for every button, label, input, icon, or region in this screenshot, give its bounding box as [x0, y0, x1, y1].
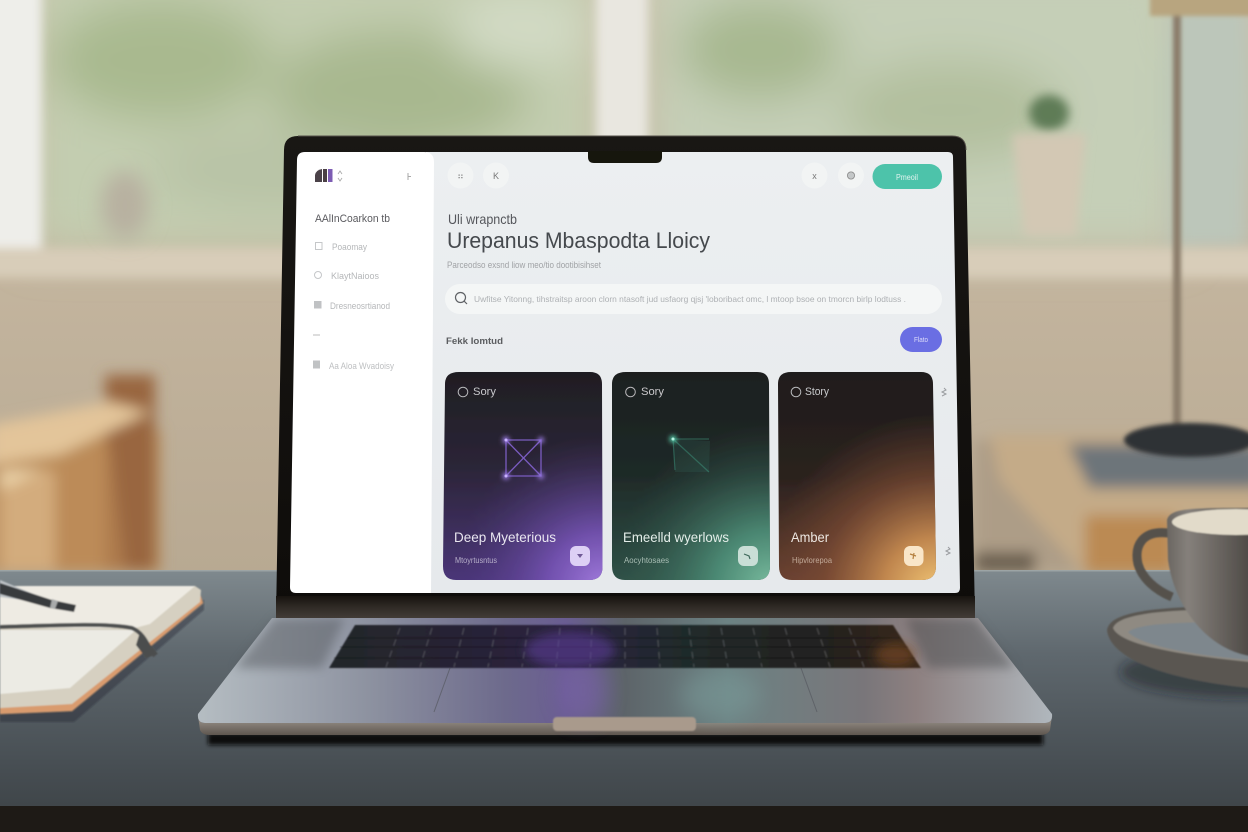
pen — [0, 580, 76, 612]
section heading: Fekk Iomtud — [446, 336, 503, 347]
purple and green trackpad reflections — [559, 658, 607, 722]
sidebar menu: Aa Aloa Wvadoisy — [329, 361, 394, 372]
lamp — [1124, 0, 1248, 457]
notebook — [0, 580, 204, 722]
glowing square icon — [502, 436, 544, 480]
primary teal button — [872, 164, 942, 189]
laptop base — [198, 618, 1052, 735]
toolbar icon buttons left: K — [493, 171, 499, 181]
sidebar menu — [313, 242, 394, 372]
card: Deep Mysterious: Sory — [473, 386, 497, 398]
card: Emerald: Sory — [641, 386, 665, 398]
desk — [0, 570, 1248, 832]
search bar — [445, 284, 942, 314]
side scroll marks — [942, 388, 950, 555]
glowing emerald square icon — [670, 436, 710, 472]
card: Emerald: Emeelld wyerlows — [623, 530, 729, 545]
keyboard — [329, 625, 921, 668]
screen — [290, 151, 960, 593]
saucer — [1107, 606, 1248, 688]
sidebar heading: AAlInCoarkon tb — [315, 213, 390, 225]
card: Amber: Amber — [791, 530, 829, 545]
heading: Parceodso exsnd liow meo/tio dootibisihset — [447, 260, 601, 270]
primary teal button: Pmeoil — [896, 173, 918, 182]
sidebar menu: Dresneosrtianod — [330, 301, 390, 312]
purple button — [900, 327, 942, 352]
toolbar icon buttons right: x — [812, 171, 817, 181]
thumb notch — [553, 717, 696, 731]
purple button: Flato — [914, 337, 928, 344]
card: Amber: Hipvlorepoa — [792, 556, 833, 565]
laptop lid and bezel — [276, 136, 975, 618]
camera notch — [588, 151, 662, 163]
sidebar menu: Poaomay — [332, 242, 367, 253]
heading — [447, 211, 710, 270]
card: Amber: Story — [805, 386, 829, 398]
card: Amber — [778, 372, 936, 580]
sofa — [975, 435, 1248, 573]
cup handle — [1137, 533, 1172, 597]
sidebar logo — [315, 169, 411, 182]
heading: Urepanus Mbaspodta Lloicy — [447, 228, 710, 253]
main panel — [425, 152, 960, 593]
vase — [101, 171, 149, 239]
card: Emerald — [612, 372, 770, 580]
heading: Uli wrapnctb — [448, 211, 517, 227]
card: Deep Mysterious: Deep Myeterious — [454, 530, 556, 545]
window with foliage — [30, 0, 1248, 250]
cup body — [1167, 508, 1248, 656]
card: Deep Mysterious: Mtoyrtusntus — [455, 556, 497, 565]
window frame — [596, 0, 648, 250]
saucer shadow — [1120, 646, 1248, 698]
search bar: Uwfitse Yitonng, tihstraitsp aroon clorn ntasoft jud usfaorg qjsj 'loboribact omc, l mtoop bsoe on tmorcn birlp lodtuss . — [474, 294, 906, 304]
blurred room background — [0, 0, 1248, 575]
window sill — [0, 248, 1248, 278]
toolbar icon buttons left: ⠶ — [457, 171, 464, 181]
coffee cup and saucer — [1107, 508, 1248, 698]
wooden shelf — [0, 375, 160, 572]
plant and pot — [1012, 95, 1086, 236]
sidebar menu: KlaytNaioos — [331, 271, 379, 282]
elastic strap — [0, 625, 155, 656]
card: Emerald: Aocyhtosaes — [624, 556, 669, 565]
laptop shadow — [208, 733, 1043, 745]
laptop — [198, 136, 1052, 745]
sidebar — [290, 152, 434, 593]
toolbar icon buttons right — [802, 162, 864, 188]
toolbar icon buttons left — [448, 162, 509, 188]
card: Deep Mysterious — [443, 372, 603, 580]
coffee foam — [1172, 509, 1248, 535]
